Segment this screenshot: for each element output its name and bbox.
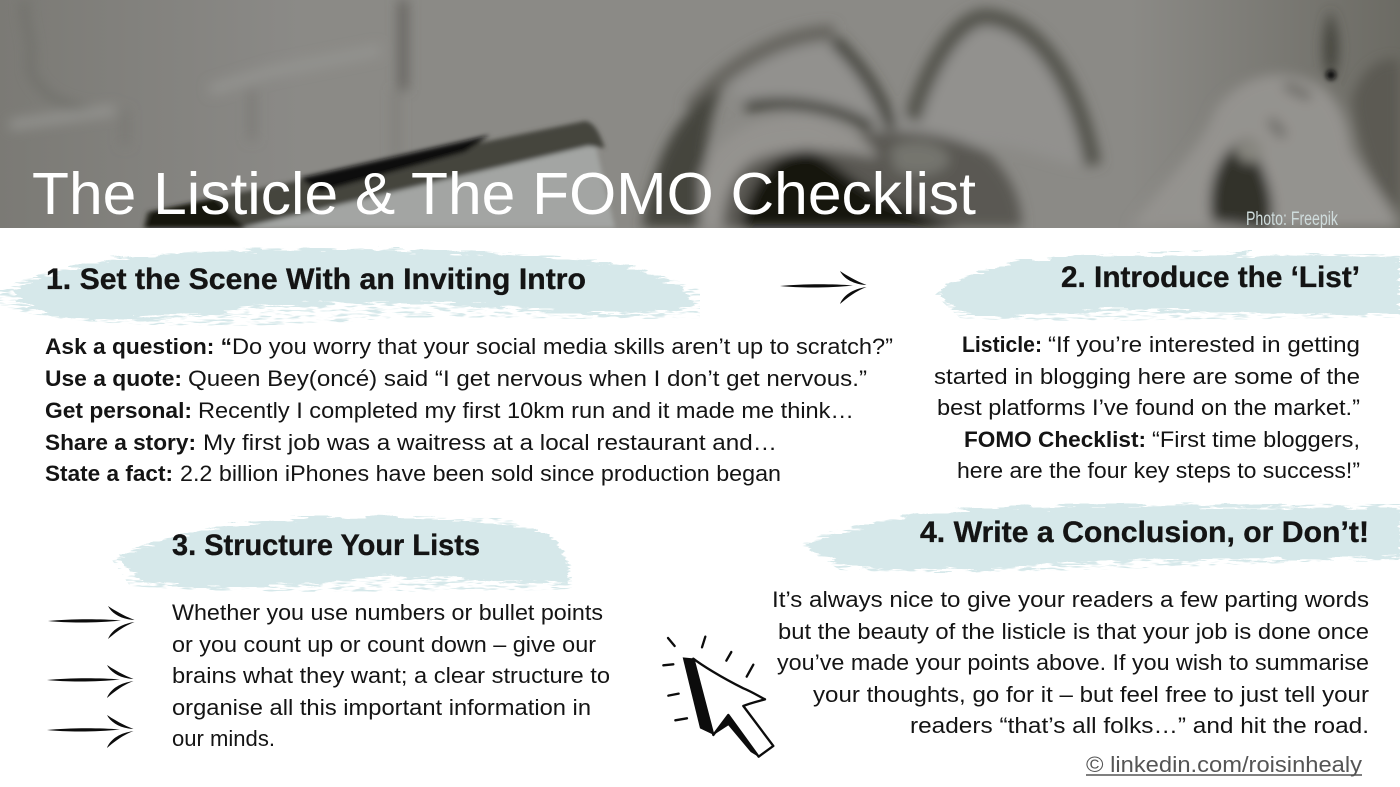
heading 1: 1. Set the Scene With an Inviting Intro (46, 263, 586, 296)
brush stroke behind heading 1 (0, 248, 700, 326)
heading 3: 3. Structure Your Lists (172, 529, 480, 562)
list intro text: “First time bloggers, (1152, 427, 1360, 452)
heading 4: 4. Write a Conclusion, or Don’t! (920, 516, 1369, 549)
icon: mouse cursor with click rays (663, 637, 773, 757)
arrows: list markers (47, 606, 134, 748)
heading 2: 2. Introduce the ‘List’ (1061, 261, 1360, 294)
intro examples text: Do you worry that your social media skills aren’t up to scratch?” (232, 334, 893, 359)
intro examples text: State a fact: (45, 461, 173, 486)
conclusion text: It’s always nice to give your readers a few parting words (772, 587, 1369, 612)
header photo (0, 0, 1400, 230)
conclusion text: you’ve made your points above. If you wish to summarise (777, 650, 1369, 675)
intro examples text: Get personal: (45, 398, 192, 423)
credit link: © linkedin.com/roisinhealy (1086, 752, 1362, 777)
panel: step 2 list (934, 254, 1400, 483)
structure text: brains what they want; a clear structure to (172, 663, 610, 688)
brush stroke behind heading 3 (112, 517, 572, 592)
list intro text: FOMO Checklist: (964, 427, 1146, 452)
structure text (172, 600, 610, 751)
list intro text: Listicle: (962, 332, 1042, 357)
structure text: our minds. (172, 726, 275, 751)
conclusion text: readers “that’s all folks…” and hit the road. (910, 713, 1369, 738)
list intro text: “If you’re interested in getting (1048, 332, 1360, 357)
arrow: step 1 to step 2 (780, 271, 866, 304)
structure text: organise all this important information in (172, 695, 591, 720)
intro examples text: 2.2 billion iPhones have been sold since production began (180, 461, 781, 486)
list intro text: here are the four key steps to success!” (957, 458, 1360, 483)
conclusion text (772, 587, 1369, 738)
list intro text: best platforms I’ve found on the market.” (937, 395, 1360, 420)
intro examples text: Recently I completed my first 10km run and it made me think… (198, 398, 854, 423)
intro examples text: Queen Bey(oncé) said “I get nervous when I don’t get nervous.” (188, 366, 867, 391)
panel: step 1 intro (0, 248, 893, 486)
structure text: Whether you use numbers or bullet points (172, 600, 603, 625)
intro examples text (45, 334, 893, 486)
panel: step 3 structure (47, 517, 610, 751)
intro examples text: Ask a question: “ (45, 334, 232, 359)
conclusion text: but the beauty of the listicle is that your job is done once (778, 619, 1369, 644)
list intro text (934, 332, 1360, 483)
photo credit: Photo: Freepik (1246, 209, 1338, 230)
list intro text: started in blogging here are some of the (934, 364, 1360, 389)
title: The Listicle & The FOMO Checklist (32, 161, 976, 227)
intro examples text: Share a story: (45, 430, 196, 455)
brush stroke behind heading 4 (800, 504, 1400, 572)
intro examples text: Use a quote: (45, 366, 182, 391)
intro examples text: My first job was a waitress at a local restaurant and… (203, 430, 777, 455)
panel: step 4 conclusion (663, 504, 1400, 757)
structure text: or you count up or count down – give our (172, 632, 596, 657)
brush stroke behind heading 2 (935, 254, 1400, 321)
conclusion text: your thoughts, go for it – but feel free to just tell your (813, 682, 1369, 707)
